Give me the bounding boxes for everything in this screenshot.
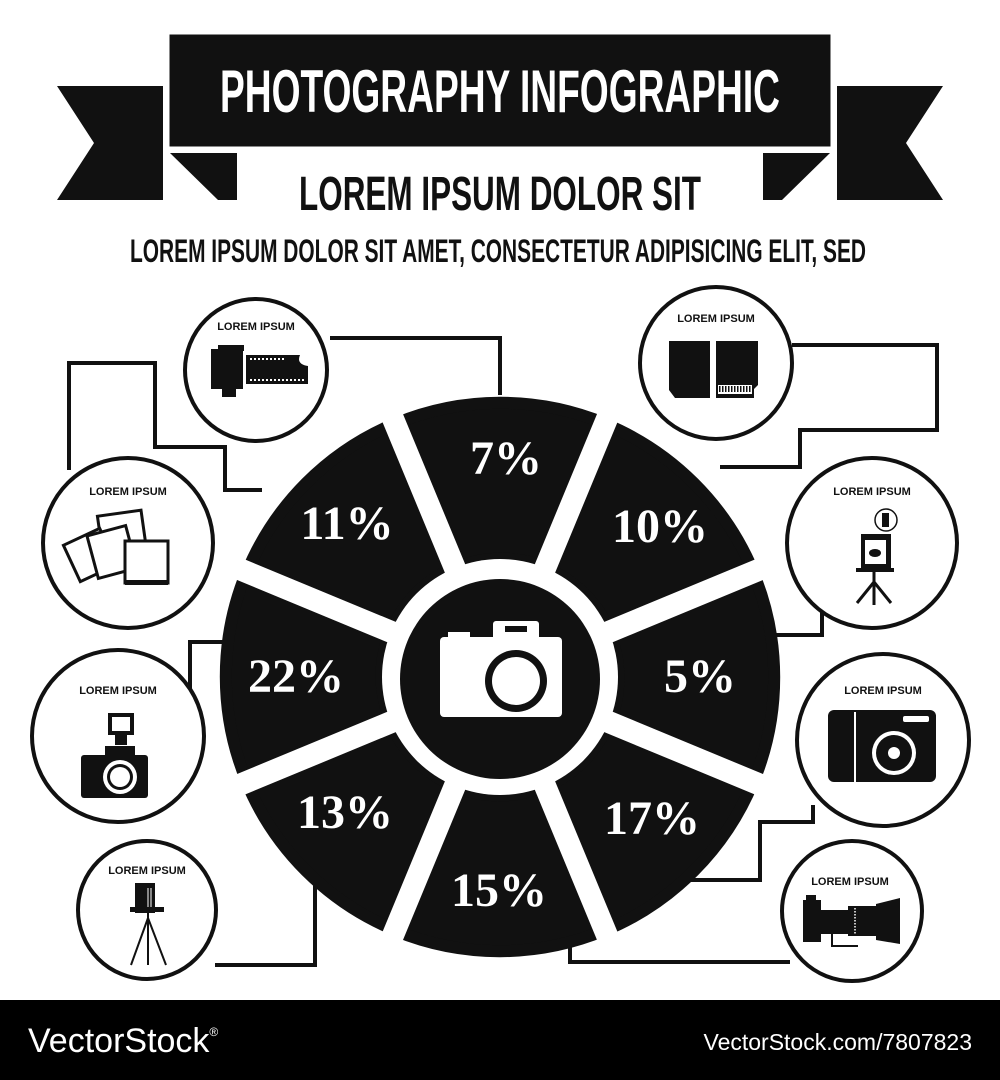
icon circle: photos [43, 458, 213, 628]
connector lines [69, 338, 937, 965]
percentage labels: 22% [248, 650, 344, 703]
center circle with camera icon [400, 579, 600, 779]
percentage labels [248, 432, 736, 917]
footer bar: VectorStock [28, 1022, 209, 1060]
icon circle: photos: LOREM IPSUM [89, 486, 167, 498]
icon circle: bellows camera on tripod [78, 841, 216, 979]
icon circle: studio camera with flash: LOREM IPSUM [833, 486, 911, 498]
icon circle: film [185, 299, 327, 441]
footer bar [0, 1000, 1000, 1080]
icon circle: telephoto lens camera [782, 841, 922, 981]
banner ribbon [57, 33, 943, 200]
icon circle: studio camera with flash [787, 458, 957, 628]
icon circle: camera with flash [32, 650, 204, 822]
icon circle: memory cards [640, 287, 792, 439]
percentage labels: 15% [451, 864, 547, 917]
subtitle: LOREM IPSUM DOLOR SIT [299, 168, 701, 221]
percentage labels: 5% [664, 650, 736, 703]
pie chart segments [173, 350, 827, 1004]
icon circle: camera with flash: LOREM IPSUM [79, 685, 157, 697]
icon circle: memory cards: LOREM IPSUM [677, 313, 755, 325]
footer bar: VectorStock.com/7807823 [704, 1029, 972, 1055]
icon circle: compact camera [797, 654, 969, 826]
icon circle: compact camera: LOREM IPSUM [844, 685, 922, 697]
icon circle: bellows camera on tripod: LOREM IPSUM [108, 865, 186, 877]
icon circle: film: LOREM IPSUM [217, 321, 295, 333]
percentage labels: 17% [604, 792, 700, 845]
percentage labels: 13% [297, 786, 393, 839]
percentage labels: 10% [612, 500, 708, 553]
percentage labels: 11% [300, 497, 394, 550]
icon circle: telephoto lens camera: LOREM IPSUM [811, 876, 889, 888]
footer bar: ® [209, 1025, 218, 1039]
percentage labels: 7% [470, 432, 542, 485]
